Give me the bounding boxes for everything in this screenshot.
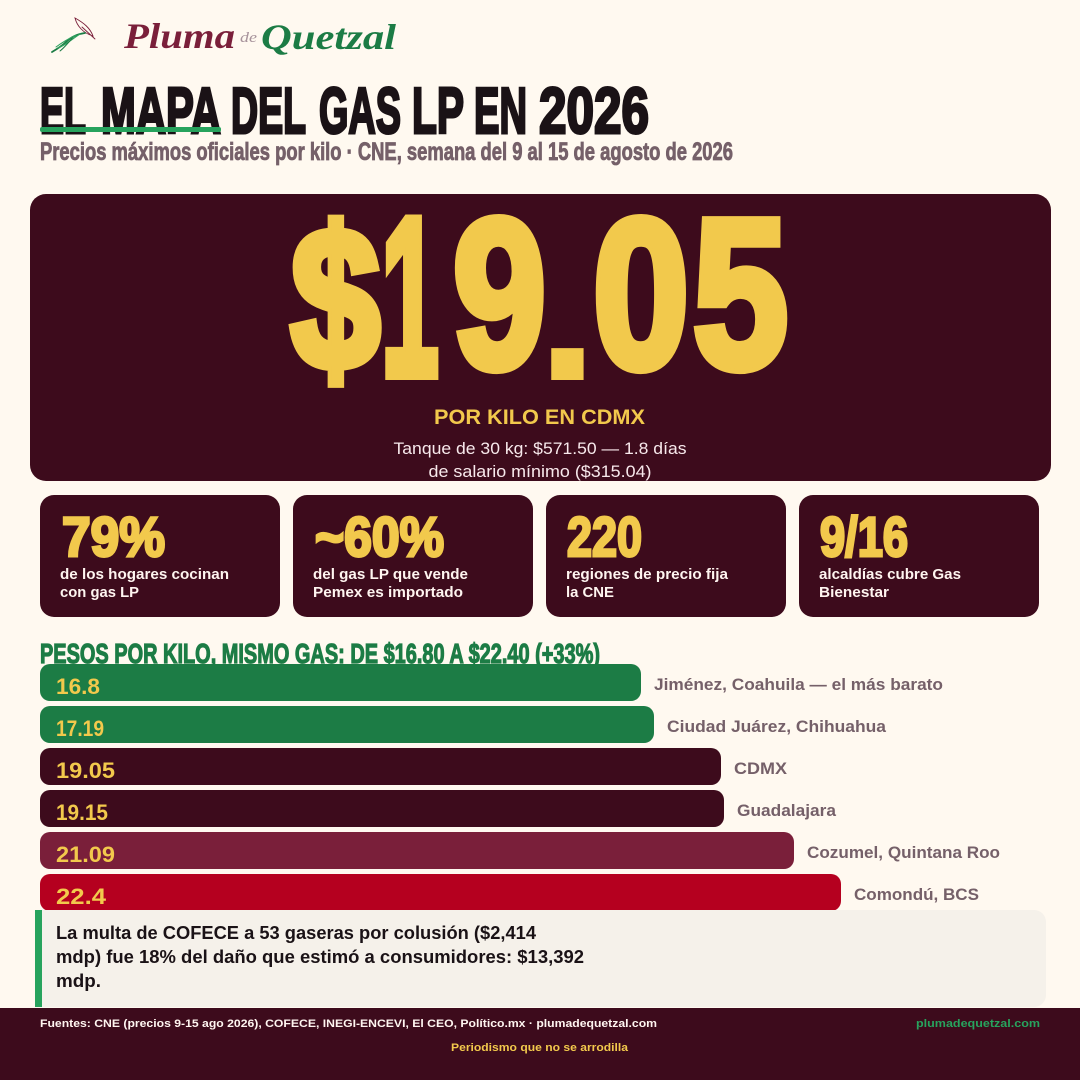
tagline: Periodismo que no se arrodilla (451, 1042, 629, 1054)
bar: Cozumel: Cozumel, Quintana Roo (807, 844, 1000, 862)
title: DEL (231, 74, 306, 147)
bar: Comondú: Comondú, BCS (854, 886, 979, 904)
bar: Cozumel: 21.09 (56, 842, 115, 867)
logo wordmark: Quetzal (261, 17, 396, 57)
bar: CDMX: CDMX (734, 760, 787, 778)
website: plumadequetzal.com (916, 1018, 1040, 1030)
icon: quetzal feather (52, 18, 95, 52)
hero number (291, 170, 788, 423)
bar: Jiménez: Jiménez, Coahuila — el más barato (654, 676, 943, 694)
logo wordmark: de (240, 30, 257, 46)
title (40, 74, 649, 147)
bar: Guadalajara: Guadalajara (737, 802, 837, 820)
title: EN (474, 74, 527, 147)
panel: stat 79%: 79% (62, 505, 165, 568)
panel: stat 220: regiones de precio fija (566, 567, 729, 583)
hero number: $ (291, 188, 380, 411)
bar: Comondú: 22.4 (56, 884, 107, 909)
bar: Cozumel (40, 832, 1000, 869)
bar: Guadalajara: 19.15 (56, 800, 108, 825)
bar: Jiménez: 16.8 (56, 674, 100, 699)
title: GAS (319, 74, 401, 147)
callout: COFECE fine (35, 910, 1046, 1007)
hero number: 0 (593, 175, 689, 412)
hero detail: de salario mínimo ($315.04) (428, 462, 652, 481)
panel: stat 60%: Pemex es importado (313, 585, 463, 601)
hero number: 9 (453, 175, 546, 412)
hero detail (394, 439, 686, 481)
chart heading: PESOS POR KILO, MISMO GAS: DE $16.80 A $22.40 (+33%) (40, 638, 600, 669)
bar: Comondú (40, 874, 979, 911)
bar: CDMX (40, 748, 787, 785)
title: 2026 (539, 74, 649, 147)
title: LP (412, 74, 464, 147)
callout: COFECE fine: La multa de COFECE a 53 gaseras por colusión ($2,414 (56, 923, 536, 943)
hero number: 5 (693, 175, 788, 412)
hero number: 1 (381, 170, 439, 423)
panel: stat 79% (40, 495, 280, 617)
bar: Guadalajara (40, 790, 837, 827)
panel: stat 220: 220 (567, 505, 642, 568)
footer (0, 1008, 1080, 1080)
panel: hero price (30, 170, 1051, 481)
panel: stat 9/16: alcaldías cubre Gas (819, 567, 961, 583)
logo: Pluma de Quetzal (52, 16, 396, 57)
bar: Ciudad Juárez: Ciudad Juárez, Chihuahua (667, 718, 887, 736)
panel: stat 79%: con gas LP (60, 585, 139, 601)
subtitle: Precios máximos oficiales por kilo · CNE, semana del 9 al 15 de agosto de 2026 (40, 138, 733, 166)
callout: COFECE fine: mdp) fue 18% del daño que estimó a consumidores: $13,392 (56, 947, 584, 967)
bar: CDMX: 19.05 (56, 758, 115, 783)
panel: stat 60%: ~60% (315, 505, 444, 568)
bar: Ciudad Juárez (40, 706, 887, 743)
hero label: POR KILO EN CDMX (434, 406, 645, 429)
hero detail: Tanque de 30 kg: $571.50 — 1.8 días (394, 439, 686, 458)
panel: stat 9/16 (799, 495, 1039, 617)
bar chart (40, 664, 1000, 911)
title: EL (40, 74, 86, 147)
panel: stat 60%: del gas LP que vende (313, 567, 468, 583)
panel: stat 220 (546, 495, 786, 617)
bar: Jiménez (40, 664, 943, 701)
callout: COFECE fine: mdp. (56, 971, 101, 991)
panel: stat 60% (293, 495, 533, 617)
logo wordmark (123, 16, 396, 57)
hero number: . (544, 231, 591, 410)
panel: stat 9/16: Bienestar (819, 585, 889, 601)
title: MAPA (101, 74, 221, 147)
panel: stat 220: la CNE (566, 585, 614, 601)
logo wordmark: Pluma (123, 16, 235, 56)
panel: stat 79%: de los hogares cocinan (60, 567, 229, 583)
sources: Fuentes: CNE (precios 9-15 ago 2026), COFECE, INEGI-ENCEVI, El CEO, Político.mx · plumadequetzal.com (40, 1018, 657, 1030)
panel: stat 9/16: 9/16 (820, 505, 908, 568)
bar: Ciudad Juárez: 17.19 (56, 716, 104, 741)
